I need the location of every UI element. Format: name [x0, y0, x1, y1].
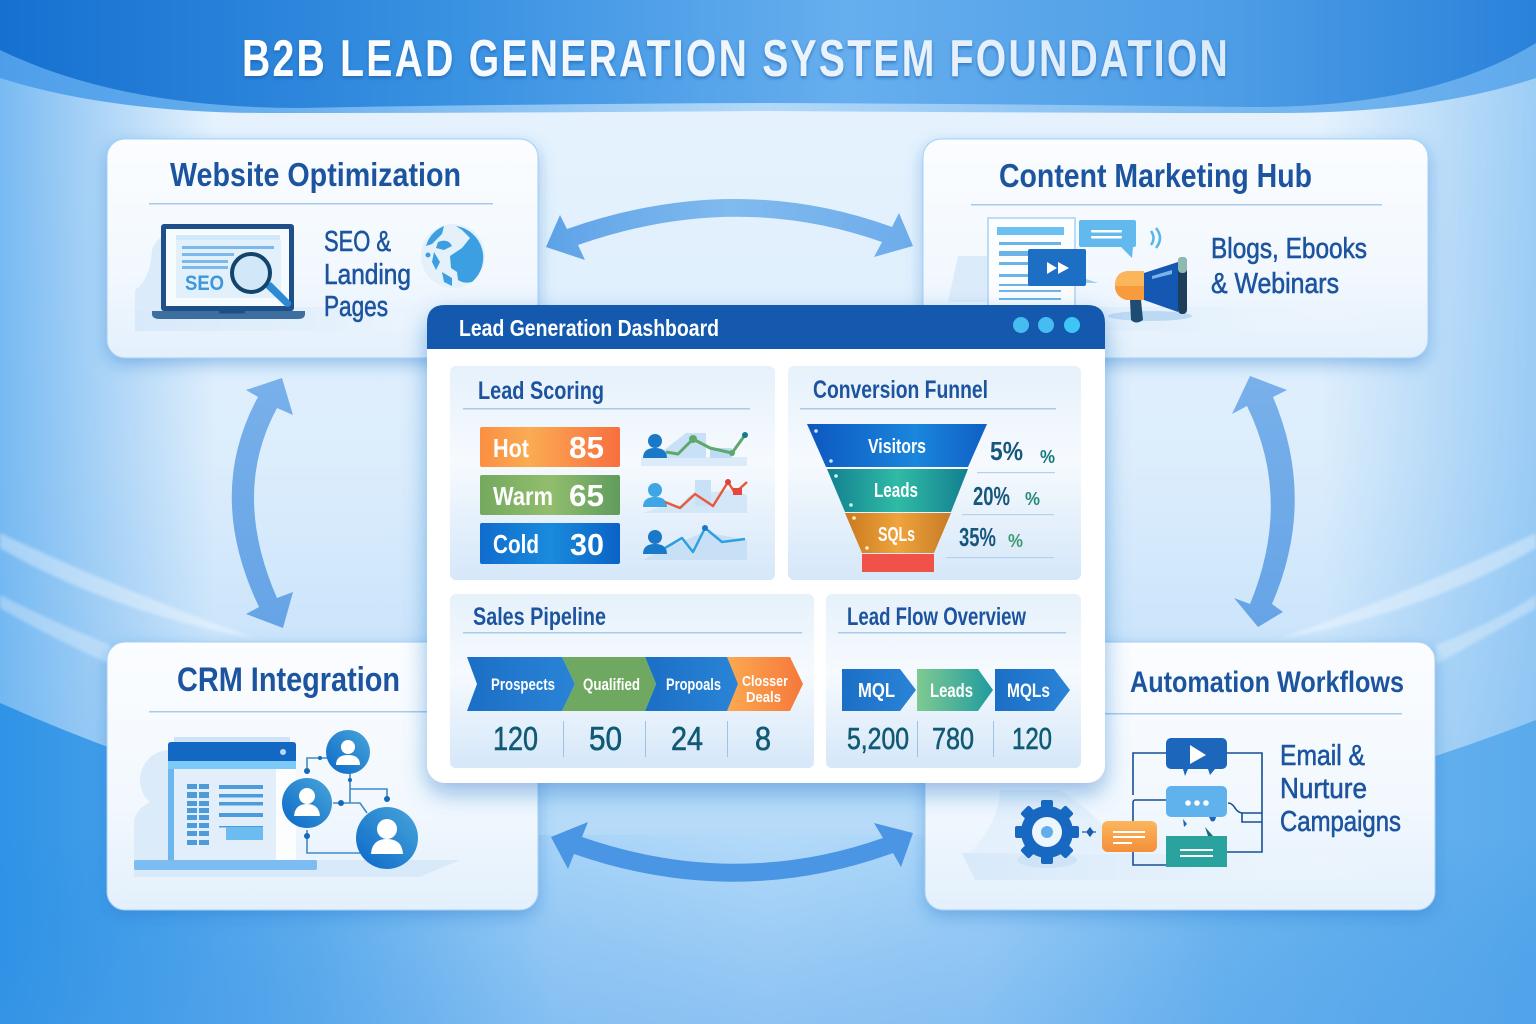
funnel: leads: Leads: [874, 480, 918, 502]
score: cold: 30: [570, 527, 604, 562]
icon: laptop seo: SEO: [185, 272, 224, 295]
pipeline counts: 50: [589, 720, 622, 757]
score: warm: Warm: [493, 481, 553, 511]
icon: crm window: [134, 737, 460, 877]
icon: connected contacts: [282, 730, 418, 869]
icon: chat message: [1166, 786, 1227, 827]
flow counts: 780: [932, 721, 974, 756]
pipeline chevrons: Deals: [746, 689, 781, 706]
dashboard header bar: Lead Generation Dashboard: [459, 315, 719, 341]
text: content marketing description: [1211, 233, 1367, 300]
text: automation description: Email &: [1280, 740, 1365, 772]
heading: crm integration: CRM Integration: [177, 661, 400, 699]
pipeline chevrons: Qualified: [583, 675, 640, 694]
icon: laptop seo: [135, 224, 305, 319]
funnel rates: %: [1008, 531, 1023, 551]
heading: sales pipeline: Sales Pipeline: [473, 603, 606, 631]
score: cold: Cold: [493, 529, 539, 559]
panel: crm integration: [107, 642, 538, 910]
text: website optimization description: [324, 226, 411, 323]
pipeline counts: 120: [493, 720, 538, 757]
chart: hot trend: [641, 432, 748, 466]
pipeline counts: 8: [755, 720, 771, 757]
pipeline chevrons: [467, 657, 803, 711]
funnel rates: 35%: [959, 522, 996, 552]
icon: megaphone: [1108, 257, 1192, 322]
score: warm: [480, 475, 620, 515]
panel: content marketing hub: [923, 139, 1428, 358]
text: website optimization description: Landing: [324, 259, 411, 291]
heading: content marketing hub: Content Marketing Hub: [999, 157, 1312, 194]
funnel: sqls: [845, 513, 951, 553]
arrow: top two-way: [546, 199, 913, 260]
icon: orange email: [1102, 821, 1157, 852]
heading: automation workflows: Automation Workflows: [1130, 666, 1404, 699]
flow counts: 120: [1012, 721, 1052, 756]
icon: workflow connectors: [1133, 753, 1262, 865]
icon: chat bubble: [1079, 220, 1160, 258]
icon: video message: [1166, 738, 1227, 776]
score: hot: 85: [569, 430, 604, 465]
arrow: right two-way: [1232, 376, 1295, 627]
heading: lead flow overview: Lead Flow Overview: [847, 603, 1026, 631]
funnel: base: [862, 554, 934, 572]
dashboard header bar: [427, 305, 1105, 349]
heading: website optimization: Website Optimization: [170, 156, 461, 193]
flow chevrons: MQL: [858, 680, 895, 702]
panel: conversion funnel: [788, 366, 1081, 580]
chart: cold trend: [643, 525, 747, 560]
funnel: visitors: Visitors: [868, 436, 926, 458]
funnel rates: 5%: [990, 436, 1023, 466]
pipeline chevrons: Prospects: [491, 675, 555, 694]
panel: sales pipeline: [450, 594, 814, 768]
text: automation description: [1280, 740, 1401, 838]
pipeline chevrons: Closser: [742, 673, 788, 690]
icon: contact 1: [326, 730, 370, 774]
text: content marketing description: & Webinars: [1211, 268, 1339, 300]
panel: lead scoring: [450, 366, 775, 580]
text: automation description: Campaigns: [1280, 806, 1401, 838]
icon: document and video: [948, 218, 1098, 308]
pipeline counts: [493, 720, 771, 757]
arrow: bottom two-way: [551, 822, 913, 882]
score: hot: [480, 427, 620, 467]
arrow: left two-way: [232, 378, 293, 628]
text: website optimization description: Pages: [324, 291, 388, 323]
flow counts: [847, 721, 1052, 757]
icon: gear: [1015, 800, 1096, 868]
heading: conversion funnel: Conversion Funnel: [813, 376, 988, 404]
funnel rates: %: [1040, 447, 1055, 467]
panel: automation workflows: [925, 642, 1435, 910]
panel: lead flow overview: [826, 594, 1081, 768]
text: content marketing description: Blogs, Ebooks: [1211, 233, 1367, 265]
score: warm: 65: [569, 478, 604, 513]
icon: contact 3: [356, 807, 418, 869]
top banner: [0, 0, 1536, 113]
title: B2B LEAD GENERATION SYSTEM FOUNDATION: [242, 30, 1230, 88]
funnel rates: %: [1025, 489, 1040, 509]
icon: teal message: [1166, 827, 1227, 867]
funnel: leads: [827, 469, 968, 512]
icon: globe: [421, 224, 485, 288]
score: hot: Hot: [493, 433, 529, 463]
heading: lead scoring: Lead Scoring: [478, 377, 604, 405]
flow chevrons: [842, 669, 1070, 711]
text: automation description: Nurture: [1280, 773, 1367, 805]
funnel rates: 20%: [973, 481, 1010, 511]
panel: website optimization: [107, 139, 538, 358]
score: cold: [480, 523, 620, 564]
text: website optimization description: SEO &: [324, 226, 391, 258]
panel: lead generation dashboard: [427, 305, 1105, 783]
pipeline chevrons: Propoals: [666, 675, 721, 694]
funnel rates: [946, 436, 1055, 558]
flow counts: 5,200: [847, 721, 909, 756]
icon: contact 2: [282, 778, 332, 828]
flow chevrons: Leads: [930, 681, 973, 702]
chart: warm trend: [643, 479, 747, 513]
funnel: sqls: SQLs: [878, 524, 915, 546]
funnel: visitors: [807, 424, 987, 467]
flow chevrons: MQLs: [1007, 681, 1050, 702]
pipeline counts: 24: [671, 720, 703, 757]
